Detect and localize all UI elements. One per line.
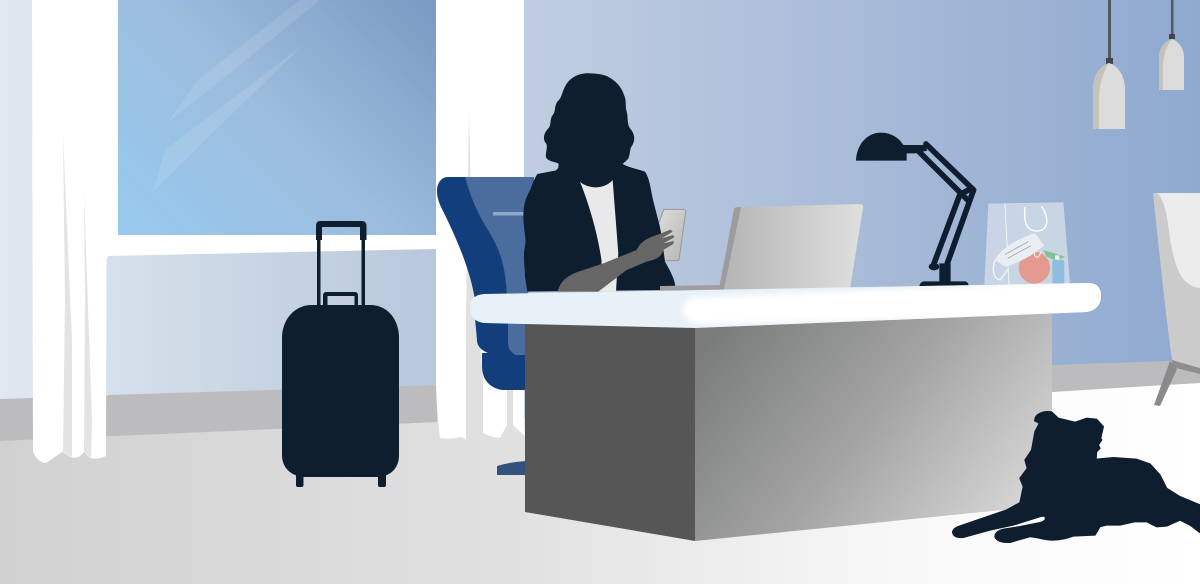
- desk left face: [525, 322, 695, 541]
- desk top highlight: [683, 280, 1110, 324]
- peach: [1019, 252, 1050, 284]
- curtain left: [32, 0, 107, 463]
- bag handle: [1025, 206, 1047, 231]
- armchair: [1153, 193, 1200, 406]
- baseboard under window: [108, 385, 437, 436]
- chair back: [437, 177, 534, 300]
- curtain right: [436, 0, 525, 445]
- wall: [0, 0, 1200, 450]
- laptop: [660, 204, 863, 291]
- office chair: [437, 177, 534, 475]
- lamp shade: [856, 133, 927, 161]
- armchair body: [1153, 193, 1200, 368]
- suitcase body: [282, 305, 399, 477]
- desk top: [470, 283, 1101, 328]
- transparent gift bag: [984, 202, 1070, 284]
- hair and jacket: [523, 73, 676, 292]
- suitcase top grip: [323, 292, 358, 306]
- desk: [470, 280, 1110, 541]
- armchair leg: [1154, 361, 1177, 406]
- laptop screen: [724, 204, 863, 289]
- lamp foot: [919, 263, 969, 286]
- fruit leaf: [1043, 250, 1066, 260]
- chair seat: [482, 353, 526, 390]
- floor: [0, 382, 1200, 584]
- sanitiser bottle: [1052, 260, 1064, 284]
- bag body: [984, 202, 1070, 284]
- armchair cushion: [1158, 193, 1200, 288]
- curtain fold shadow: [466, 110, 483, 445]
- pendant lamp small: [1159, 0, 1184, 90]
- window glare: [153, 0, 320, 192]
- suitcase wheels: [296, 472, 304, 487]
- desk right face: [695, 311, 1052, 541]
- arm and hand: [558, 230, 674, 292]
- pendant lamp large: [1093, 0, 1125, 129]
- desk lamp: [856, 133, 974, 286]
- baseboard right: [1050, 360, 1200, 392]
- phone: [657, 209, 686, 261]
- armchair rail: [1172, 360, 1200, 374]
- woman silhouette: [523, 73, 686, 292]
- wall under window: [108, 249, 436, 395]
- window: [106, 0, 438, 258]
- baseboard left: [0, 385, 437, 441]
- face mask: [995, 233, 1044, 267]
- suitcase telescopic handle: [316, 221, 366, 306]
- dog silhouette: [953, 412, 1200, 542]
- shirt: [580, 180, 618, 292]
- lamp arms: [917, 144, 974, 265]
- chair foot: [497, 461, 526, 475]
- suitcase: [282, 221, 399, 487]
- laptop edge: [719, 207, 746, 289]
- laptop base: [660, 285, 724, 291]
